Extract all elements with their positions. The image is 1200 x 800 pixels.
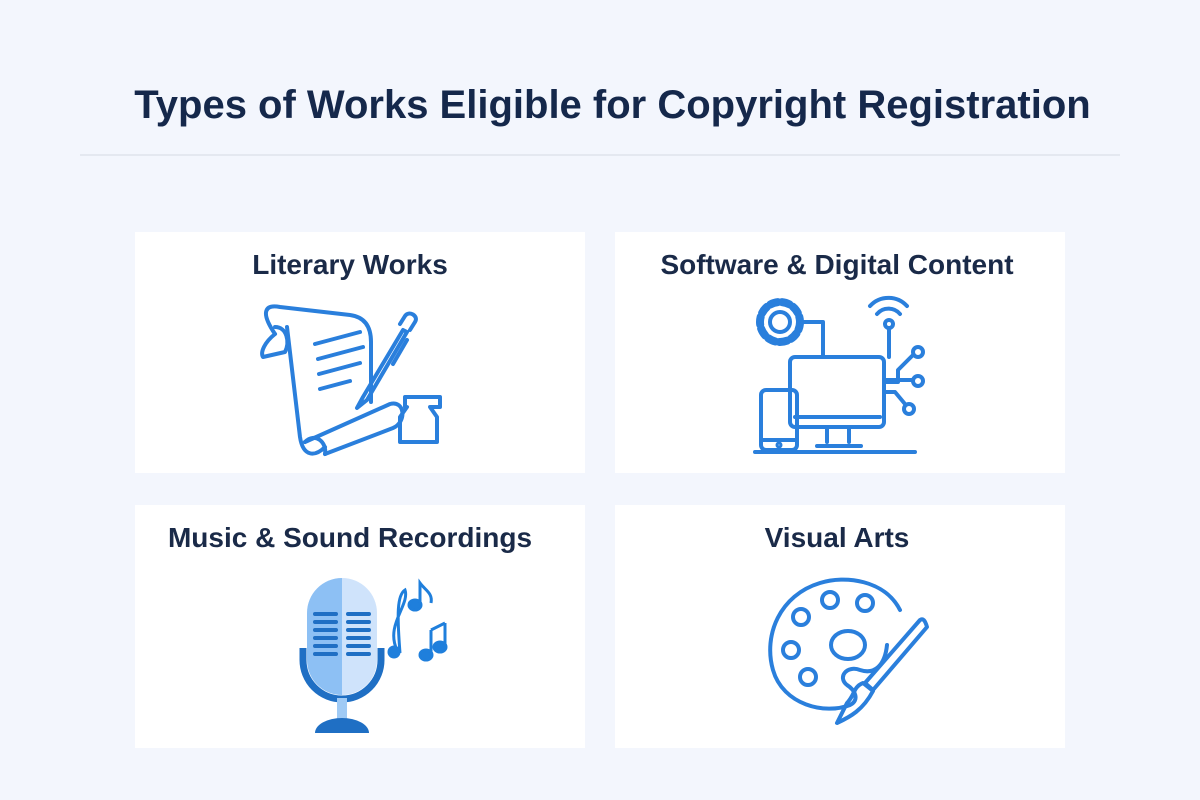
- icon: scroll, pen, ink: [260, 304, 442, 456]
- panel: software: [615, 232, 1065, 473]
- heading: music: Music & Sound Recordings: [168, 522, 532, 553]
- heading: visual arts: Visual Arts: [765, 522, 909, 553]
- icon: palette and brush: [768, 578, 929, 725]
- icon: microphone and notes: [300, 578, 448, 733]
- heading: literary: Literary Works: [252, 249, 448, 280]
- panel: visual arts: [615, 505, 1065, 748]
- panel: music: [135, 505, 585, 748]
- icon: computer and devices: [753, 296, 925, 454]
- title: Types of Works Eligible for Copyright Registration: [134, 83, 1091, 127]
- heading: software: Software & Digital Content: [660, 249, 1014, 280]
- panel: literary works: [135, 232, 585, 473]
